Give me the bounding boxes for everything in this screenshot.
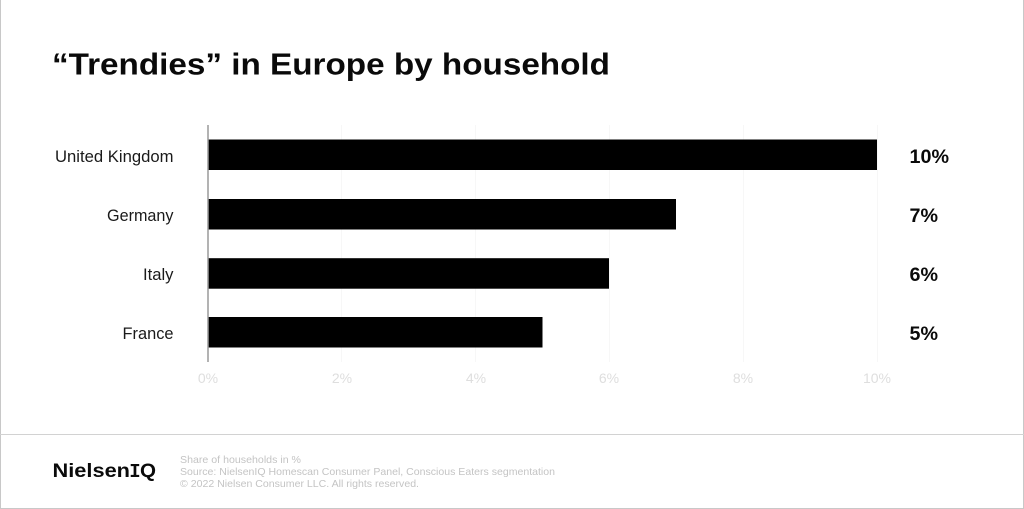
bar: Italy xyxy=(208,258,609,289)
value labels: 6% xyxy=(910,265,938,286)
value labels xyxy=(910,147,949,345)
category labels: United Kingdom xyxy=(55,148,174,166)
bar: Germany xyxy=(208,199,676,230)
category labels: Germany xyxy=(107,207,174,225)
value labels: 5% xyxy=(910,324,938,345)
x-axis labels: 2% xyxy=(332,370,352,386)
category labels: France xyxy=(122,325,174,343)
footer notes: © 2022 Nielsen Consumer LLC. All rights reserved. xyxy=(180,478,419,490)
logo: NielsenIQ: Nielsen xyxy=(52,461,130,482)
category labels: Italy xyxy=(143,266,174,284)
value labels: 10% xyxy=(910,147,949,168)
footer notes xyxy=(180,454,555,490)
x-axis labels: 0% xyxy=(198,370,218,386)
logo: NielsenIQ: Q xyxy=(140,461,156,482)
footer notes: Share of households in % xyxy=(180,454,301,466)
title: “Trendies” in Europe by household xyxy=(52,48,610,82)
bar: United Kingdom xyxy=(208,140,877,170)
bar: France xyxy=(208,317,542,348)
footer notes: Source: NielsenIQ Homescan Consumer Panel, Conscious Eaters segmentation xyxy=(180,466,555,478)
logo: NielsenIQ xyxy=(52,461,156,483)
value labels: 7% xyxy=(910,206,938,227)
vertical axis xyxy=(207,125,209,362)
logo: NielsenIQ: I xyxy=(129,461,141,483)
category labels xyxy=(55,148,174,343)
x-axis labels xyxy=(198,370,891,386)
x-axis labels: 10% xyxy=(863,370,891,386)
x-axis labels: 6% xyxy=(599,370,619,386)
x-axis labels: 4% xyxy=(466,370,486,386)
bar chart xyxy=(55,125,949,386)
x-axis labels: 8% xyxy=(733,370,753,386)
